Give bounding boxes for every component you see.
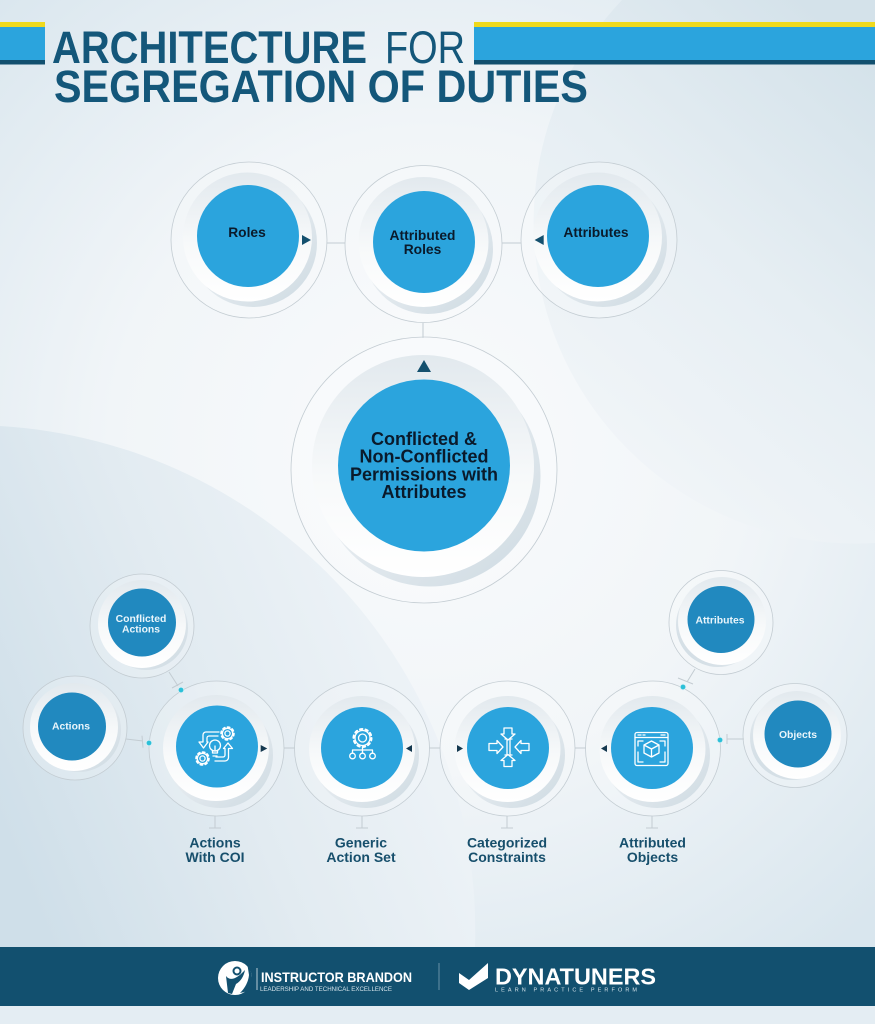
title: SEGREGATION OF DUTIES bbox=[54, 61, 588, 112]
node: Conflicted and Non-Conflicted Permissions with Attributes bbox=[291, 337, 557, 603]
node: Objects bbox=[743, 684, 847, 788]
node: Roles bbox=[171, 162, 327, 318]
node: Attributed Objects bbox=[586, 681, 720, 816]
node: Actions: Actions bbox=[52, 722, 90, 732]
node: Actions With COI bbox=[149, 681, 284, 816]
label: Actions With COI: Actions bbox=[189, 834, 241, 850]
node: Attributed Roles: Attributed bbox=[390, 228, 455, 243]
label: Actions With COI bbox=[186, 834, 244, 865]
node: Conflicted and Non-Conflicted Permissions with Attributes: Permissions with bbox=[350, 464, 498, 484]
connectors: top cluster bbox=[327, 243, 521, 338]
dot: Actions joint bbox=[146, 740, 152, 746]
node: Conflicted Actions: Conflicted bbox=[116, 614, 166, 625]
node: Conflicted and Non-Conflicted Permissions with Attributes: Attributes bbox=[382, 482, 466, 502]
logo: Instructor Brandon: LEADERSHIP AND TECHNICAL EXCELLENCE bbox=[260, 987, 392, 993]
icon: window with cube bbox=[635, 732, 668, 766]
title bbox=[52, 22, 588, 112]
logo: Instructor Brandon: INSTRUCTOR BRANDON bbox=[261, 969, 412, 985]
node: Conflicted Actions bbox=[90, 574, 194, 678]
arrow: Attributes to Attributed Roles bbox=[535, 235, 544, 245]
label: Actions With COI: With COI bbox=[186, 849, 244, 865]
label: Generic Action Set: Action Set bbox=[326, 849, 396, 865]
arrow: Categorized to next bbox=[457, 745, 463, 752]
node: Categorized Constraints bbox=[440, 681, 575, 816]
logo: Dynatuners bbox=[459, 963, 656, 994]
node: Attributes (bottom): Attributes bbox=[695, 616, 745, 626]
node: Conflicted Actions: Actions bbox=[122, 624, 160, 636]
label: Attributed Objects bbox=[619, 834, 686, 865]
footer band bbox=[0, 947, 875, 1006]
label: Generic Action Set bbox=[326, 834, 396, 865]
label: Categorized Constraints bbox=[467, 834, 547, 865]
arrow: Roles to Attributed Roles bbox=[302, 235, 311, 245]
node: Attributes (top) bbox=[521, 162, 677, 318]
logo: Dynatuners: LEARN PRACTICE PERFORM bbox=[495, 988, 637, 994]
icon: gears, bulb and arrows bbox=[196, 727, 234, 765]
node: Roles: Roles bbox=[228, 225, 266, 240]
dot: Conflicted Actions joint bbox=[178, 687, 184, 693]
header band: right bbox=[474, 22, 875, 64]
arrow: COI to Generic Action Set bbox=[261, 745, 267, 752]
label: Generic Action Set: Generic bbox=[335, 834, 387, 850]
arrow: Attributed Objects to Categorized bbox=[601, 745, 607, 752]
header band: left bbox=[0, 22, 45, 64]
node: Attributed Roles: Roles bbox=[404, 242, 442, 257]
node: Attributed Roles bbox=[345, 166, 502, 322]
logo: Dynatuners: DYNATUNERS bbox=[495, 964, 656, 990]
dot: Attributes joint bbox=[680, 684, 686, 690]
node: Attributes (bottom) bbox=[669, 570, 773, 674]
connectors: bottom row bbox=[126, 669, 744, 828]
dot: Objects joint bbox=[717, 737, 723, 743]
divider bbox=[438, 963, 440, 990]
title: ARCHITECTURE bbox=[52, 22, 367, 73]
label: Categorized Constraints: Constraints bbox=[468, 849, 546, 865]
logo: Instructor Brandon bbox=[218, 961, 412, 995]
icon: gear with branching nodes bbox=[350, 729, 375, 759]
node: Actions bbox=[23, 676, 127, 780]
label: Categorized Constraints: Categorized bbox=[467, 834, 547, 850]
label: Attributed Objects: Attributed bbox=[619, 834, 686, 850]
arrow: Categorized to Generic Action Set bbox=[406, 745, 412, 752]
node: Objects: Objects bbox=[779, 730, 817, 741]
arrow: permissions up to Attributed Roles bbox=[417, 360, 431, 372]
node: Conflicted and Non-Conflicted Permissions with Attributes: Conflicted & bbox=[371, 429, 477, 449]
node: Conflicted and Non-Conflicted Permissions with Attributes: Non-Conflicted bbox=[360, 446, 488, 466]
icon: four arrows converging on brackets bbox=[489, 728, 529, 766]
node: Attributes (top): Attributes bbox=[563, 225, 629, 240]
label: Attributed Objects: Objects bbox=[627, 849, 678, 865]
title: FOR bbox=[385, 22, 465, 73]
node: Generic Action Set bbox=[294, 681, 430, 816]
